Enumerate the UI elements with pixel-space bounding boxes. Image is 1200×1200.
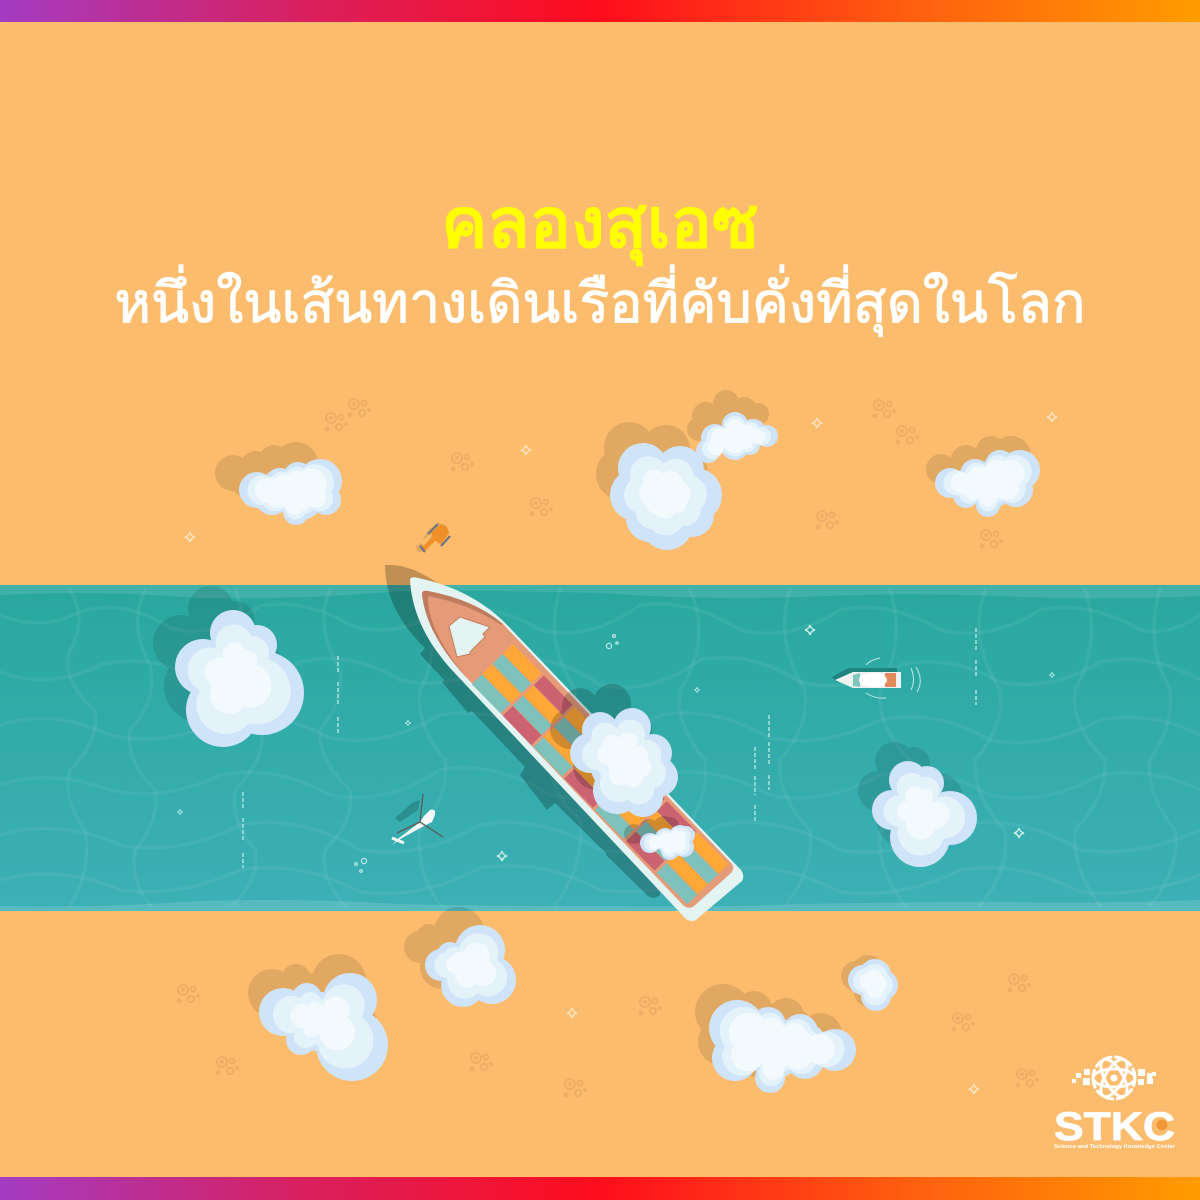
logo orange dot: [1156, 1120, 1168, 1130]
cloud 1: [215, 442, 342, 525]
bottom shore wave: [0, 900, 1200, 911]
cloud 9: [248, 954, 388, 1081]
logo pixel squares: [1072, 1069, 1156, 1085]
sand sparkles: [185, 412, 1057, 1094]
logo tagline: Science and Technology Knowledge Center: [1054, 1144, 1176, 1150]
canal water: [0, 585, 1200, 911]
cargo containers: [472, 644, 728, 904]
logo wordmark: STKC: [1054, 1105, 1175, 1149]
STKC logo: [1054, 1055, 1176, 1150]
water sparkles: [177, 625, 1055, 861]
cloud 8: over water right: [858, 742, 977, 867]
cloud 10: [404, 907, 516, 1007]
sand pebble clusters: [178, 399, 1038, 1096]
water dashes: [243, 628, 976, 868]
cloud 5: over water left: [153, 586, 304, 747]
excavator on sand: [415, 522, 450, 552]
subtitle: busiest shipping route: หนึ่งในเส้นทางเดินเรือที่คับคั่งที่สุดในโลก: [114, 265, 1086, 337]
helicopter: [392, 794, 443, 845]
speedboat: [832, 658, 920, 698]
cloud 11: [841, 955, 898, 1011]
container ship: [385, 565, 743, 921]
ship shadow: [385, 565, 660, 898]
cloud 7: small over ship: [624, 816, 695, 860]
bottom gradient bar: [0, 1177, 1200, 1200]
water ripple network: [0, 590, 1200, 905]
ship bridge: [449, 617, 490, 657]
top gradient bar: [0, 0, 1200, 22]
top shore wave: [0, 585, 1200, 598]
cloud 6: over ship: [550, 684, 678, 817]
cloud 2: [596, 422, 722, 550]
cloud 3: [687, 390, 778, 463]
cloud 4: [926, 436, 1040, 517]
title: [114, 185, 1086, 337]
cloud 12: [695, 984, 856, 1093]
bubbles: [355, 635, 618, 872]
logo atom icon: [1093, 1055, 1135, 1101]
title: canal name: คลองสุเอซ: [441, 185, 759, 267]
ship hull: [410, 577, 743, 921]
ship deck: [422, 591, 733, 908]
